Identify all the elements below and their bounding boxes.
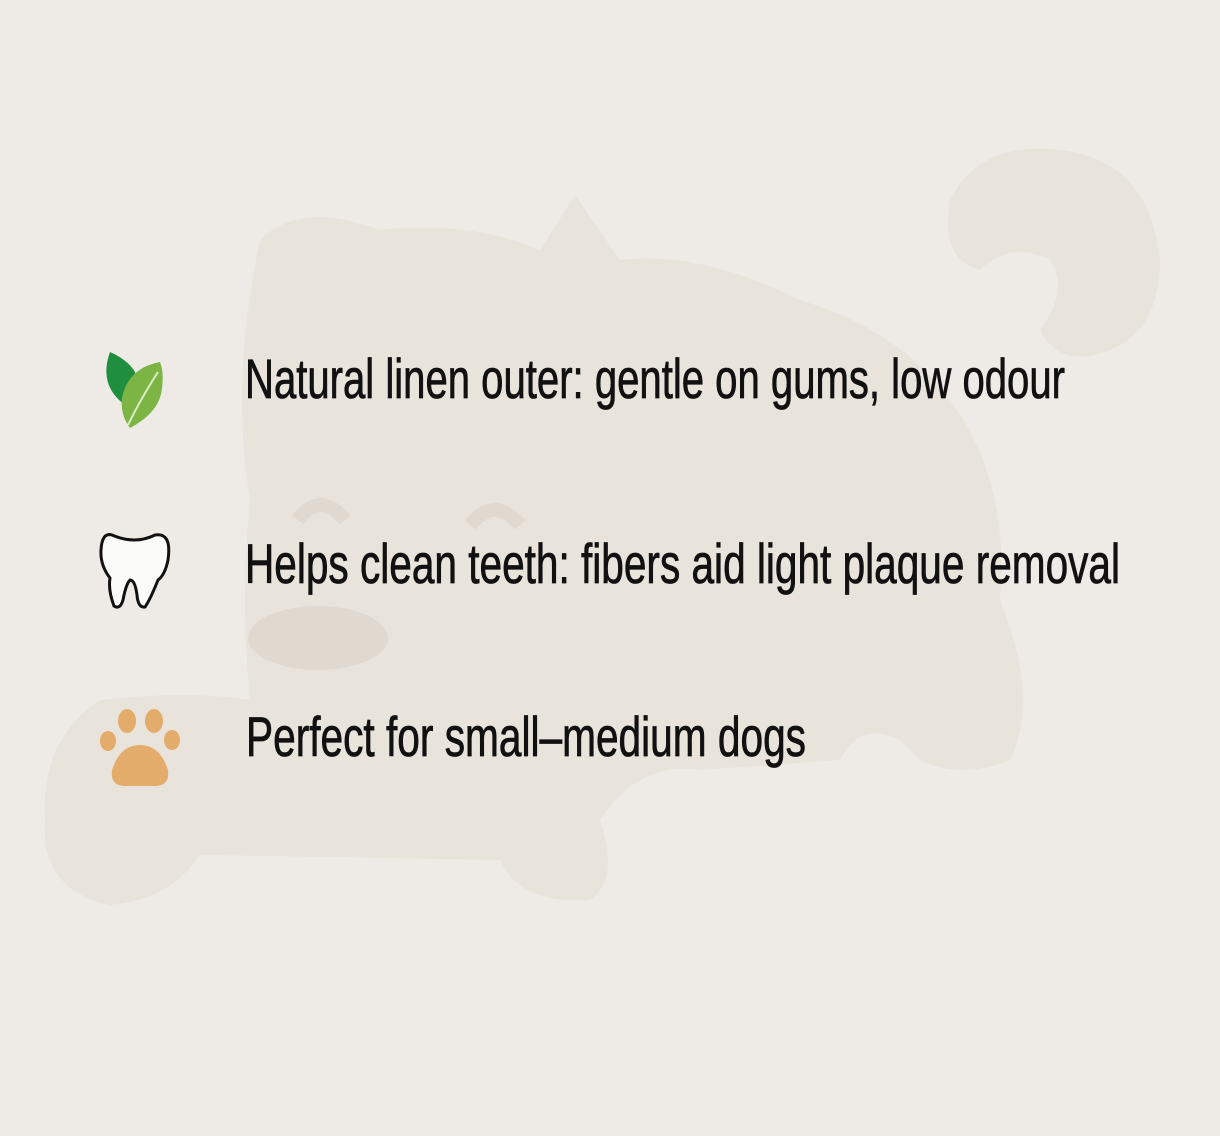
icon: leaves [106,352,163,428]
background dog silhouette [45,149,1160,905]
icon: paw [100,709,180,786]
icon: tooth [101,535,169,607]
text: feature 3: Perfect for small–medium dogs [246,705,806,768]
